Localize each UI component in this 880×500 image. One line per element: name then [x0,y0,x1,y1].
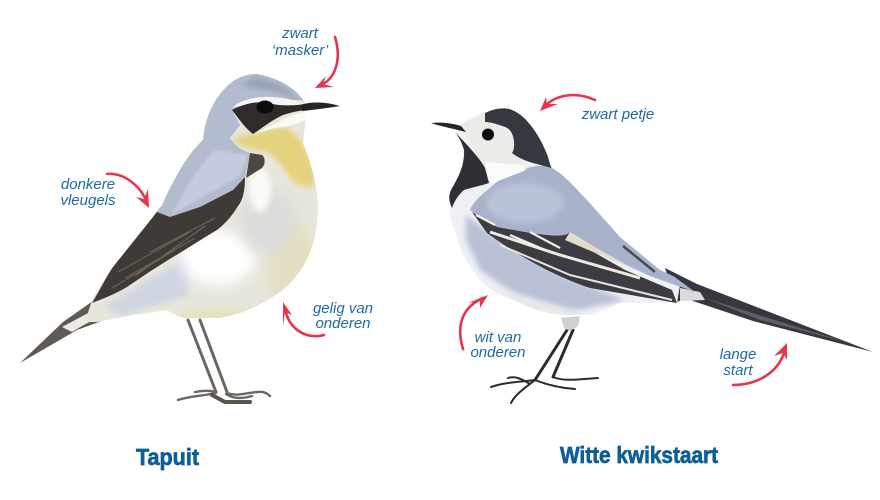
black bib: Witte kwikstaart [449,132,489,208]
dark wing: Tapuit [92,177,245,303]
callout: lange start: start [723,362,753,379]
callout: donkere vleugels: vleugels [60,192,116,209]
beak: Witte kwikstaart [431,123,466,132]
callout: wit van onderen: wit van [475,329,521,346]
white cheek: Witte kwikstaart [460,112,527,183]
legs: Tapuit [178,320,270,402]
eye: Witte kwikstaart [482,128,494,140]
grey head and mantle: Tapuit [150,71,310,219]
arrow: wit van onderen [460,295,488,349]
black mask: Tapuit [232,102,306,134]
eye: Tapuit [256,100,274,114]
callout: wit van onderen: onderen [470,344,526,361]
heading: Witte kwikstaart: Witte kwikstaart [560,442,718,468]
white supercilium: Tapuit [232,97,305,108]
illustration: Witte kwikstaart bird [431,108,873,403]
body: Tapuit [85,74,318,322]
arrow: gelig van onderen [283,302,324,336]
white throat: Tapuit [254,111,305,135]
heading: Tapuit: Tapuit [136,444,199,470]
dark shoulder: Tapuit [246,153,265,178]
callout: donkere vleugels: donkere [61,176,115,193]
arrow: zwart masker [315,37,338,88]
belly shading: Witte kwikstaart [466,215,625,312]
callout: gelig van onderen [283,300,373,336]
yellow breast: Tapuit [232,127,315,187]
arrow: donkere vleugels [107,174,149,208]
belly shading: Tapuit [263,224,314,297]
wing feathers: Witte kwikstaart [472,212,677,303]
legs: Witte kwikstaart [491,330,598,403]
callout: zwart masker [272,25,338,88]
thigh: Witte kwikstaart [561,316,580,331]
grey back: Witte kwikstaart [470,165,695,292]
tail: Witte kwikstaart [665,268,873,352]
arrow: lange start [733,343,787,385]
body: Witte kwikstaart [450,108,680,315]
tail: Tapuit [20,296,110,363]
callout: gelig van onderen: onderen [315,315,371,332]
callout: lange start: lange [720,346,756,363]
callout: zwart masker: zwart [281,25,319,42]
callout: zwart petje: zwart petje [581,106,654,123]
callout: wit van onderen [460,295,526,361]
beak: Tapuit [300,102,340,111]
callout: zwart masker: ‘masker’ [272,42,329,59]
callout: lange start [720,343,787,385]
arrow: zwart petje [540,95,595,111]
callout: donkere vleugels [60,174,149,209]
callout: gelig van onderen: gelig van [313,300,373,317]
black cap: Witte kwikstaart [485,108,551,168]
illustration: Tapuit bird [20,71,340,402]
callout: zwart petje [540,95,654,123]
